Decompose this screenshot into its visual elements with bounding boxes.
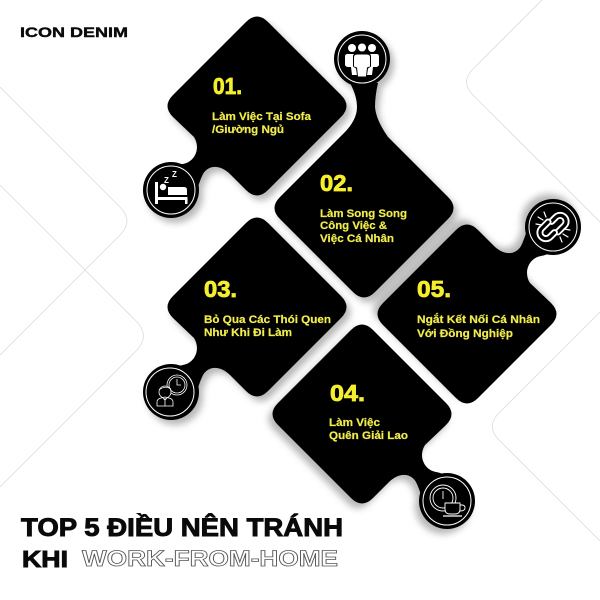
title outlined WORK-FROM-HOME: WORK-FROM-HOME <box>82 546 338 571</box>
number 03: 03. <box>204 276 237 302</box>
number 05: 05. <box>417 276 451 302</box>
panel: card 02 <box>274 31 454 298</box>
card 02 text: Việc Cá Nhân <box>320 233 394 245</box>
card 01 text: /Giường Ngủ <box>212 124 284 136</box>
card 02 text: Làm Song Song <box>320 208 407 220</box>
panel: card 04 <box>272 324 475 529</box>
card 01 text: Làm Việc Tại Sofa <box>212 111 312 123</box>
card 05 text: Với Đồng Nghiệp <box>417 328 513 340</box>
card 03 text: Bỏ Qua Các Thói Quen <box>204 314 331 326</box>
icon: three people <box>338 35 386 83</box>
card 02 shape <box>274 31 454 298</box>
card 03 text: Như Khi Đi Làm <box>204 327 292 339</box>
brand name: ICON DENIM <box>20 24 128 40</box>
panel: card 01 <box>143 16 346 218</box>
number 02: 02. <box>320 170 353 196</box>
icon: clock and coffee cup <box>423 477 471 525</box>
card 02 text: Công Việc & <box>320 220 387 232</box>
card 01 shape <box>143 16 346 218</box>
icon: person with clock <box>146 368 194 416</box>
icon: broken chain link <box>529 203 577 251</box>
number 04: 04. <box>330 380 365 406</box>
number 01: 01. <box>213 73 242 99</box>
icon: sleeping in bed <box>147 166 195 214</box>
card 05 text: Ngắt Kết Nối Cá Nhân <box>417 313 540 326</box>
panel: card 05 <box>378 199 581 404</box>
icon: sleeping in bed: Z <box>172 170 177 179</box>
title KHI: KHI <box>22 546 68 572</box>
title <box>21 512 343 572</box>
card 04 shape <box>272 324 475 529</box>
card 04 text: Quên Giải Lao <box>329 430 408 442</box>
card 03 shape <box>143 218 346 420</box>
icon: sleeping in bed: Z <box>164 176 169 185</box>
title line 1: TOP 5 ĐIỀU NÊN TRÁNH <box>21 512 343 542</box>
card 05 shape <box>378 199 581 404</box>
panel: card 03 <box>143 218 346 420</box>
card 04 text: Làm Việc <box>329 417 380 429</box>
